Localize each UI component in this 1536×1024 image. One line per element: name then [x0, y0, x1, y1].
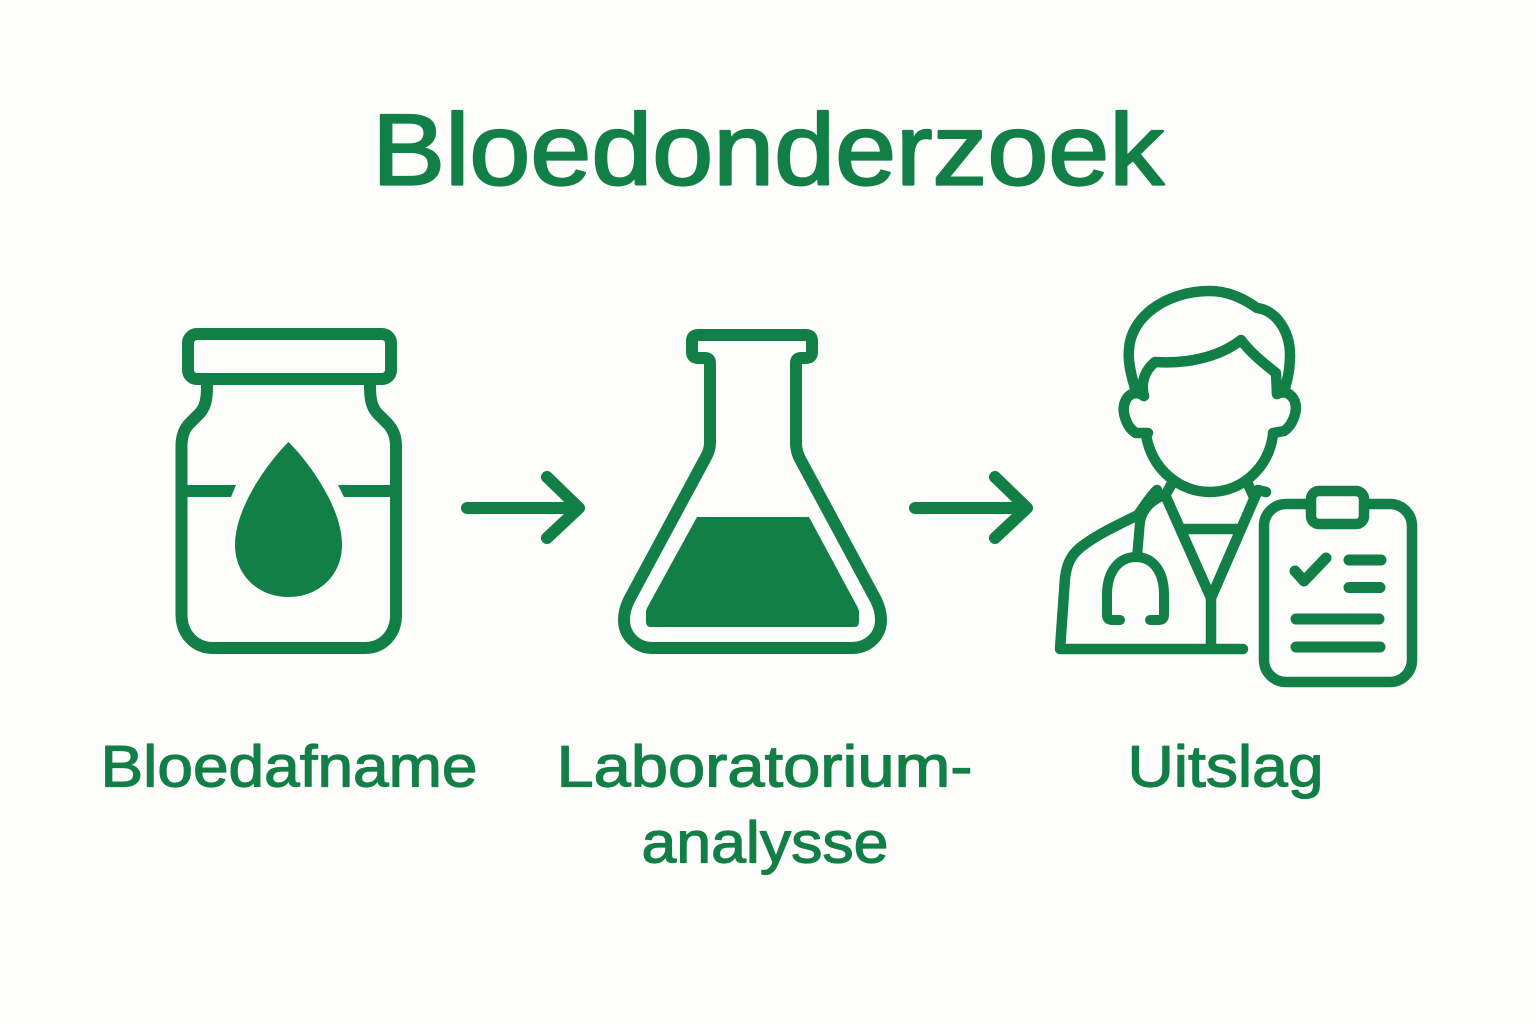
label: lab analysis: analysse	[642, 810, 888, 876]
label: lab analysis	[556, 734, 972, 876]
label: blood draw: Bloedafname	[100, 734, 478, 800]
clipboard clip	[1311, 491, 1364, 524]
label: result: Uitslag	[1128, 734, 1324, 800]
doctor face	[1146, 435, 1273, 492]
arrow: sampling to lab	[467, 477, 579, 538]
stethoscope	[1107, 497, 1164, 620]
jar label lines	[181, 485, 396, 497]
blood drop	[235, 442, 342, 597]
label: lab analysis: Laboratorium-	[556, 734, 972, 800]
check mark	[1295, 558, 1326, 581]
jar lid	[188, 334, 391, 379]
doctor hairline	[1143, 340, 1277, 396]
doctor collar	[1166, 482, 1266, 598]
title: Bloedonderzoek	[372, 94, 1165, 206]
doctor hair	[1129, 291, 1290, 388]
checklist lines	[1296, 560, 1381, 647]
icon: doctor with clipboard	[1060, 291, 1412, 682]
flask liquid	[646, 517, 859, 627]
arrow: lab to result	[915, 477, 1027, 538]
doctor coat	[1060, 490, 1243, 649]
clipboard board	[1264, 504, 1412, 682]
flask outline	[624, 335, 881, 648]
icon: lab flask	[624, 335, 881, 648]
icon: blood sample jar	[181, 334, 396, 648]
jar body	[182, 385, 396, 648]
doctor ears	[1124, 392, 1296, 433]
